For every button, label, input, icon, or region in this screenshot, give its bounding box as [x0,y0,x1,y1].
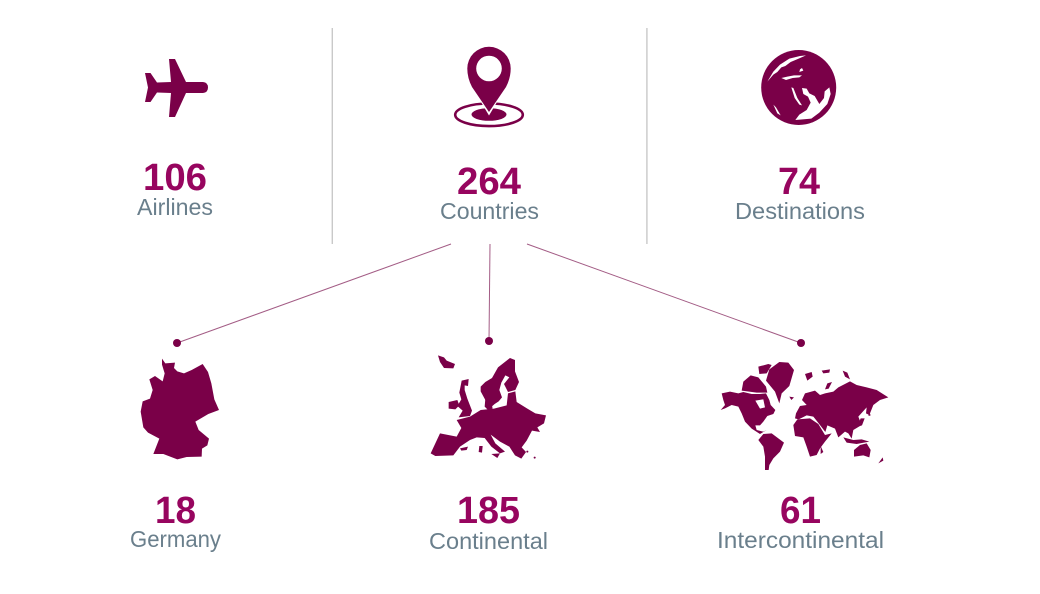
stat: airlines [137,59,213,220]
icon: location pin [455,47,523,126]
connector: to Germany [173,244,451,347]
number: 18: 18 [155,490,196,532]
connector: to Continental [485,244,493,345]
map: world [721,362,888,470]
label: Airlines: Airlines [137,194,213,220]
label: Destinations: Destinations [735,198,865,224]
label: Countries: Countries [440,198,539,224]
stat: Germany [130,359,221,552]
label: Intercontinental: Intercontinental [717,527,884,553]
number: 264: 264 [457,161,521,203]
icon: globe [761,50,836,125]
number: 185: 185 [457,490,520,532]
label: Germany: Germany [130,526,221,552]
icon: airplane [145,59,208,117]
stat: Intercontinental [717,362,888,553]
number: 61: 61 [780,490,821,532]
number: 106: 106 [143,157,207,199]
map: Europe [431,355,546,459]
stat: Continental [429,355,548,554]
stat: countries [440,47,539,224]
stat: destinations [735,50,865,224]
label: Continental: Continental [429,528,548,554]
map: Germany [141,359,219,459]
connector: to Intercontinental [527,244,805,347]
number: 74: 74 [778,161,820,203]
